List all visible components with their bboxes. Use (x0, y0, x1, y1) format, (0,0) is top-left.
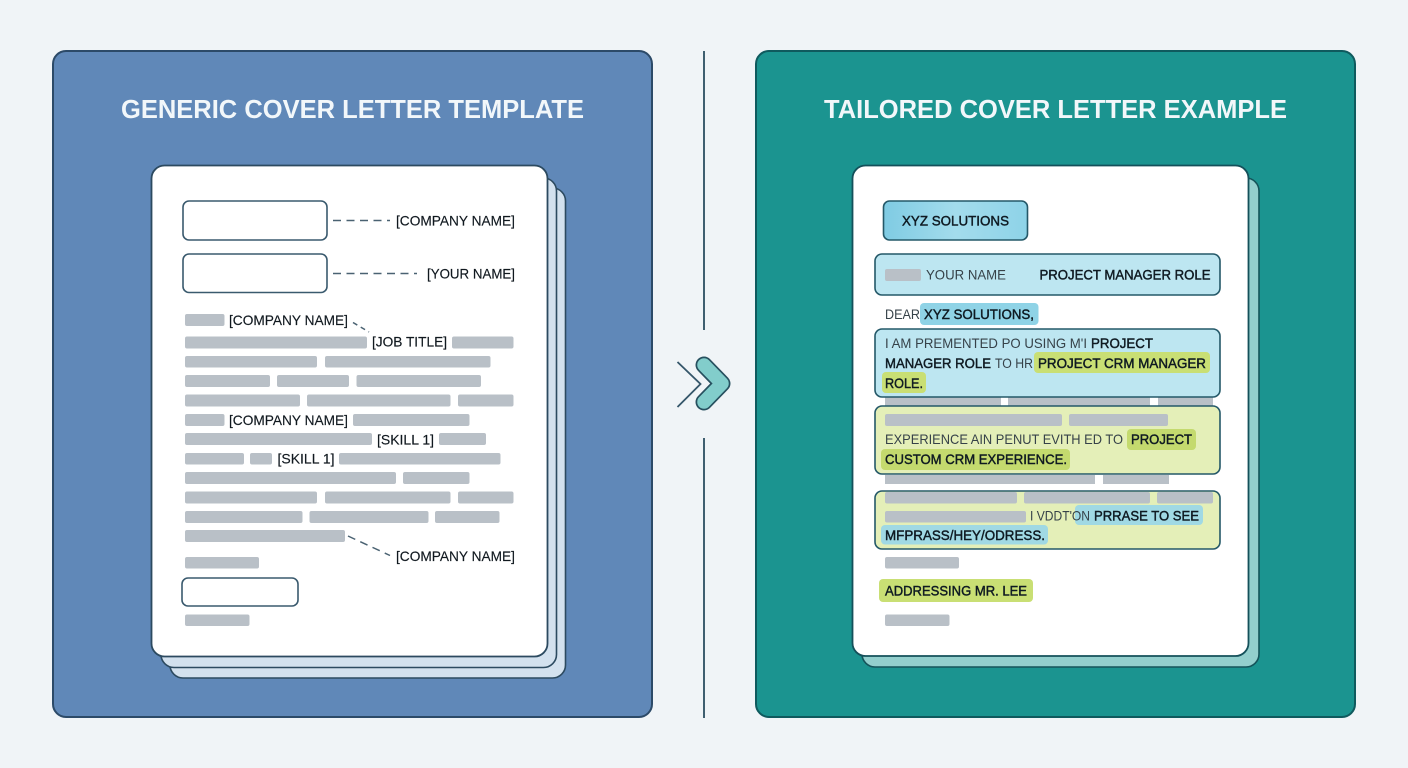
generic letter page (152, 166, 548, 656)
paragraph: closing, green (875, 491, 1220, 549)
panel: tailored cover letter example (756, 51, 1355, 717)
signature highlight: addressing Mr. Lee: ADDRESSING MR. LEE (885, 582, 1027, 598)
callout: closing company name: [COMPANY NAME] (396, 548, 515, 564)
salutation (885, 303, 1038, 325)
placeholder text body: [SKILL 1] (377, 432, 434, 448)
panel: generic cover letter template (53, 51, 652, 717)
salutation: DEAR (885, 306, 920, 322)
paragraph: opening, blue: PROJECT (1091, 335, 1153, 351)
paragraph: opening, blue: MANAGER ROLE (885, 355, 991, 371)
paragraph: experience, green: EXPERIENCE AIN PENUT EVITH ED TO (885, 431, 1123, 447)
placeholder bar: footer (885, 614, 950, 626)
back page (862, 178, 1259, 667)
heading: generic template: GENERIC COVER LETTER TEMPLATE (121, 94, 584, 124)
signature highlight: addressing Mr. Lee (879, 579, 1033, 602)
tailored letter page (852, 166, 1248, 656)
placeholder text body: [SKILL 1] (278, 450, 334, 466)
company field: XYZ Solutions (884, 201, 1028, 240)
paragraph: opening, blue: PROJECT CRM MANAGER (1038, 355, 1206, 371)
salutation: XYZ SOLUTIONS, (924, 306, 1034, 322)
name and role band: PROJECT MANAGER ROLE (1040, 266, 1210, 282)
divider with arrow (678, 51, 722, 718)
paragraph: experience, green (875, 406, 1220, 474)
placeholder text body: [JOB TITLE] (372, 334, 447, 350)
paragraph: opening, blue (875, 329, 1220, 397)
placeholder bars behind first paragraph (885, 392, 1213, 406)
heading: tailored example: TAILORED COVER LETTER EXAMPLE (824, 94, 1287, 124)
empty field: company name (183, 201, 327, 240)
paragraph: closing, green: MFPRASS/HEY/ODRESS. (885, 527, 1045, 543)
name and role band: YOUR NAME (926, 266, 1006, 282)
company field: XYZ Solutions: XYZ SOLUTIONS (902, 212, 1009, 228)
callout: company name: [COMPANY NAME] (396, 212, 515, 228)
callout: closing company name (348, 536, 515, 564)
paragraph: closing, green: I VDDT'ON (1030, 508, 1090, 524)
placeholder text body (185, 312, 514, 626)
empty field: your name (183, 254, 327, 292)
placeholder bar: sign-off (885, 557, 959, 568)
paragraph: closing, green: PRRASE TO SEE (1094, 508, 1199, 524)
paragraph: opening, blue: TO HR (995, 355, 1033, 371)
icon: double chevron arrow (678, 362, 722, 407)
placeholder text body: [COMPANY NAME] (229, 412, 348, 428)
paragraph: opening, blue: I AM PREMENTED PO USING M'I (885, 335, 1087, 351)
placeholder text body: [COMPANY NAME] (229, 312, 348, 328)
name and role band (875, 254, 1220, 295)
paragraph: experience, green: PROJECT (1131, 431, 1192, 447)
paragraph: experience, green: CUSTOM CRM EXPERIENCE. (885, 451, 1067, 467)
placeholder bars between paragraphs (885, 475, 1169, 484)
callout: your name: [YOUR NAME] (427, 266, 515, 282)
paragraph: opening, blue: ROLE. (885, 375, 923, 391)
stacked back pages (161, 178, 566, 678)
empty field: signature (182, 578, 298, 606)
